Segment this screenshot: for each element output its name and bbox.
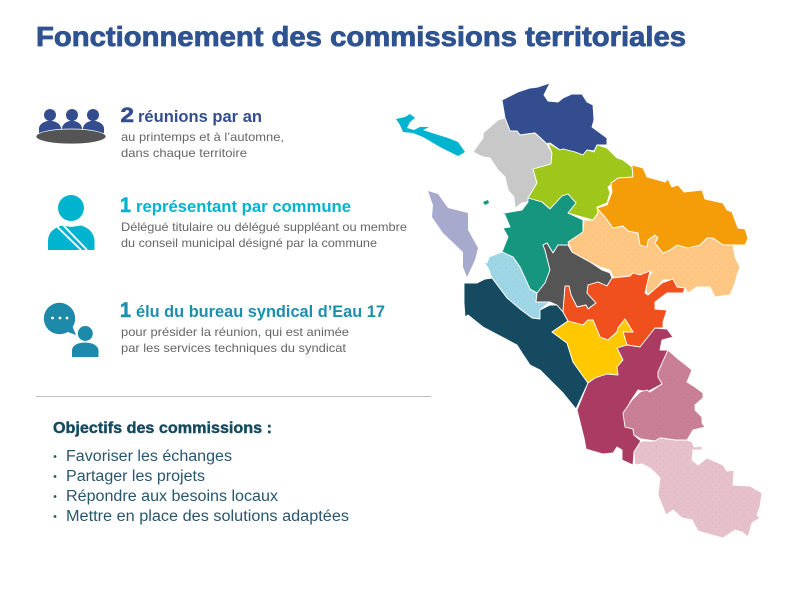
text block: 1 représentant par commune: 1: [120, 194, 131, 217]
text block: 1 représentant par commune: Délégué titulaire ou délégué suppléant ou membre: [121, 220, 407, 234]
text block: 1 élu du bureau syndical: élu du bureau syndical d’Eau 17: [136, 302, 385, 321]
text block: 1 élu du bureau syndical: [120, 299, 385, 355]
text block: objectifs des commissions: Objectifs des commissions :: [53, 420, 272, 437]
icon: representative with sash: [48, 195, 94, 250]
island: Oléron: [428, 191, 478, 277]
text block: 1 représentant par commune: [120, 194, 407, 250]
text block: 2 réunions par an: 2: [120, 104, 134, 127]
text block: 1 élu du bureau syndical: pour présider la réunion, qui est animée: [121, 325, 349, 339]
territory: yellow: [552, 319, 633, 383]
text block: 1 élu du bureau syndical: par les services techniques du syndicat: [121, 341, 347, 355]
title: Fonctionnement des commissions territoriales: [36, 21, 686, 52]
territory: orange: [597, 165, 748, 253]
icon: people around a table: [36, 109, 106, 144]
territory: crimson: [577, 328, 673, 465]
territory: dark blue coast: [464, 278, 588, 409]
territory: green: [528, 143, 633, 220]
text block: objectifs des commissions: Répondre aux besoins locaux: [66, 488, 278, 505]
territory: peach: [568, 208, 740, 297]
text block: 2 réunions par an: [120, 104, 284, 160]
island: small islet: [483, 200, 489, 205]
text block: objectifs des commissions: [53, 420, 349, 525]
icon: speech bubble and person: [44, 303, 98, 357]
text block: 2 réunions par an: au printemps et à l’automne,: [121, 130, 284, 144]
text block: objectifs des commissions: Mettre en place des solutions adaptées: [66, 508, 349, 525]
territory: light blue: [483, 252, 550, 319]
territory: pink: [623, 350, 705, 441]
text block: objectifs des commissions: Favoriser les échanges: [66, 448, 232, 465]
text block: 2 réunions par an: dans chaque territoire: [121, 146, 247, 160]
territory: navy north: [502, 83, 607, 155]
text block: 2 réunions par an: réunions par an: [138, 107, 262, 126]
territory: light pink: [634, 438, 762, 538]
map of territories: [396, 83, 762, 538]
territory: red orange: [563, 271, 685, 347]
island: Ré: [396, 114, 465, 156]
text block: 1 représentant par commune: du conseil municipal désigné par la commune: [121, 236, 377, 250]
territory: grey: [473, 118, 552, 208]
territory: dark grey: [536, 243, 612, 312]
text block: 1 représentant par commune: représentant par commune: [136, 197, 351, 216]
text block: 1 élu du bureau syndical: 1: [120, 299, 131, 322]
territory: teal: [499, 194, 583, 293]
text block: objectifs des commissions: Partager les projets: [66, 468, 205, 485]
